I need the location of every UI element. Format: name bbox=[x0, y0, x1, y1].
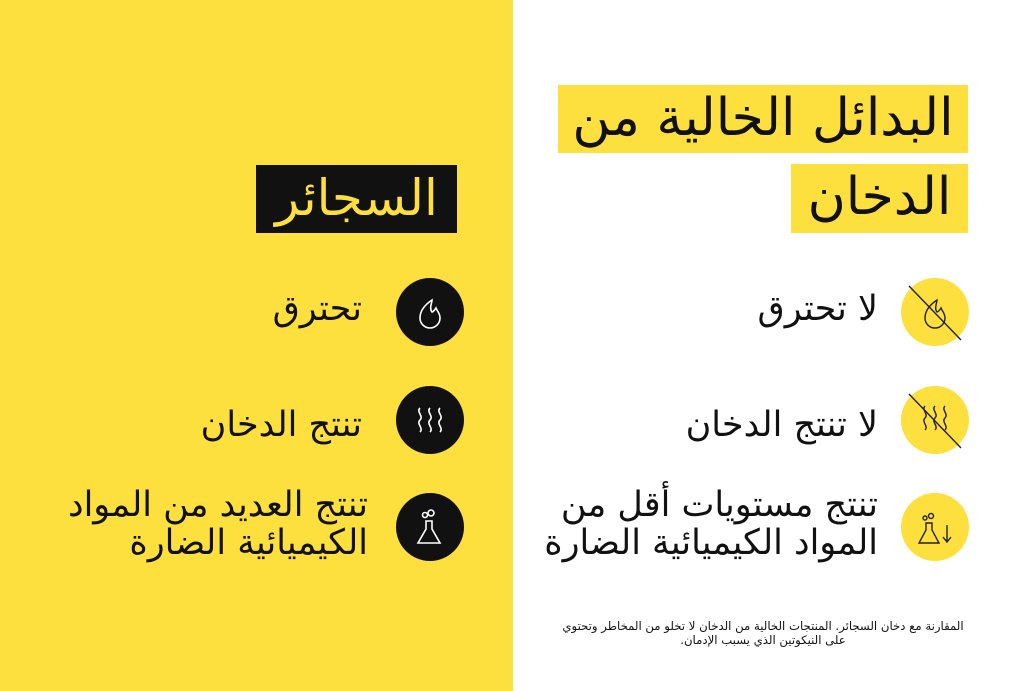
text: combustion: تحترق bbox=[273, 289, 362, 329]
text: many harmful chemicals: الكيميائية الضارة bbox=[129, 523, 368, 563]
text: fewer harmful chemicals bbox=[544, 481, 878, 563]
icon: no smoke bbox=[901, 386, 969, 454]
icon: flask bbox=[396, 493, 464, 561]
panel: cigarettes (yellow left half) bbox=[0, 0, 513, 691]
text: many harmful chemicals: تنتج العديد من المواد bbox=[68, 485, 368, 525]
heading: cigarettes bbox=[256, 165, 457, 233]
footnote: على النيكوتين الذي يسبب الإدمان. bbox=[680, 633, 846, 647]
heading: smoke-free alternatives: الدخان bbox=[808, 167, 951, 227]
text: no combustion: لا تحترق bbox=[758, 289, 878, 329]
icon: flask with down arrow bbox=[901, 493, 969, 561]
text: produces smoke: تنتج الدخان bbox=[201, 405, 362, 445]
text: no smoke: لا تنتج الدخان bbox=[686, 405, 878, 445]
text: fewer harmful chemicals: المواد الكيميائية الضارة bbox=[544, 523, 878, 563]
panel: smoke-free alternatives bbox=[544, 85, 969, 647]
heading: cigarettes: السجائر bbox=[275, 169, 438, 227]
text: many harmful chemicals bbox=[68, 485, 368, 563]
icon: smoke bbox=[396, 386, 464, 454]
icon: flame bbox=[396, 278, 464, 346]
icon: no flame bbox=[901, 278, 969, 346]
footnote bbox=[562, 619, 964, 647]
footnote: المقارنة مع دخان السجائر. المنتجات الخالية من الدخان لا تخلو من المخاطر وتحتوي bbox=[562, 619, 964, 633]
text: fewer harmful chemicals: تنتج مستويات أقل من bbox=[561, 485, 878, 525]
heading: smoke-free alternatives: البدائل الخالية من bbox=[572, 88, 954, 148]
heading: smoke-free alternatives bbox=[558, 85, 968, 233]
